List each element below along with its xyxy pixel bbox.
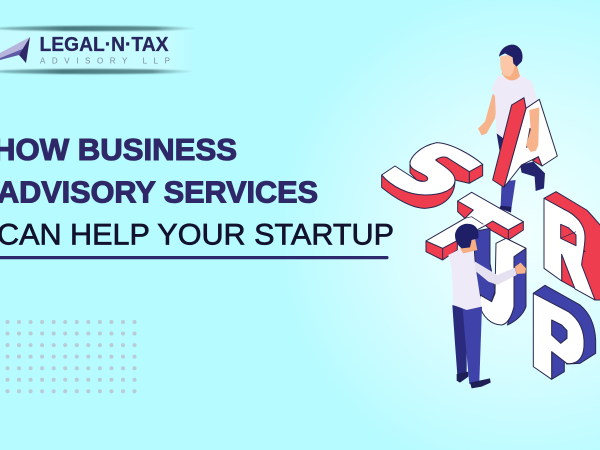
letter S bbox=[382, 143, 483, 208]
hand bbox=[515, 263, 526, 274]
heading: how business advisory services: ADVISORY SERVICES bbox=[0, 176, 318, 210]
logo: Legal-N-Tax Advisory LLP bbox=[0, 26, 195, 74]
heading: how business advisory services: HOW BUSINESS bbox=[0, 133, 237, 167]
shoes bbox=[457, 372, 491, 388]
left arm bbox=[478, 94, 498, 135]
heading underline bbox=[0, 256, 388, 259]
heading: how business advisory services bbox=[0, 133, 318, 210]
logo: Legal-N-Tax Advisory LLP: ADVISORY LLP bbox=[40, 56, 170, 66]
letter A bbox=[493, 98, 557, 187]
shirt bbox=[492, 75, 540, 138]
rear trouser leg bbox=[452, 305, 467, 375]
letter P bbox=[533, 285, 596, 379]
person carrying letter A bbox=[478, 45, 557, 213]
face bbox=[500, 54, 515, 77]
shirt bbox=[448, 249, 482, 310]
neck and face bbox=[460, 238, 477, 253]
person touching letter U bbox=[448, 224, 526, 388]
front trouser leg bbox=[463, 307, 482, 384]
hair bbox=[499, 45, 523, 67]
front shoe bbox=[499, 206, 512, 213]
subheading: can help your startup: CAN HELP YOUR STARTUP bbox=[0, 218, 394, 252]
neck bbox=[502, 65, 520, 80]
logo: Legal-N-Tax Advisory LLP: LEGAL·N·TAX bbox=[40, 33, 169, 56]
letter U bbox=[473, 228, 526, 325]
icon: paper plane bbox=[0, 37, 30, 63]
back leg and trousers bbox=[497, 133, 545, 191]
arm bbox=[475, 262, 517, 285]
dot grid bbox=[6, 320, 136, 393]
letter R bbox=[544, 192, 600, 300]
hair bbox=[455, 224, 479, 248]
right arm bbox=[526, 107, 539, 152]
front leg bbox=[501, 180, 516, 207]
letter T bbox=[426, 192, 523, 260]
